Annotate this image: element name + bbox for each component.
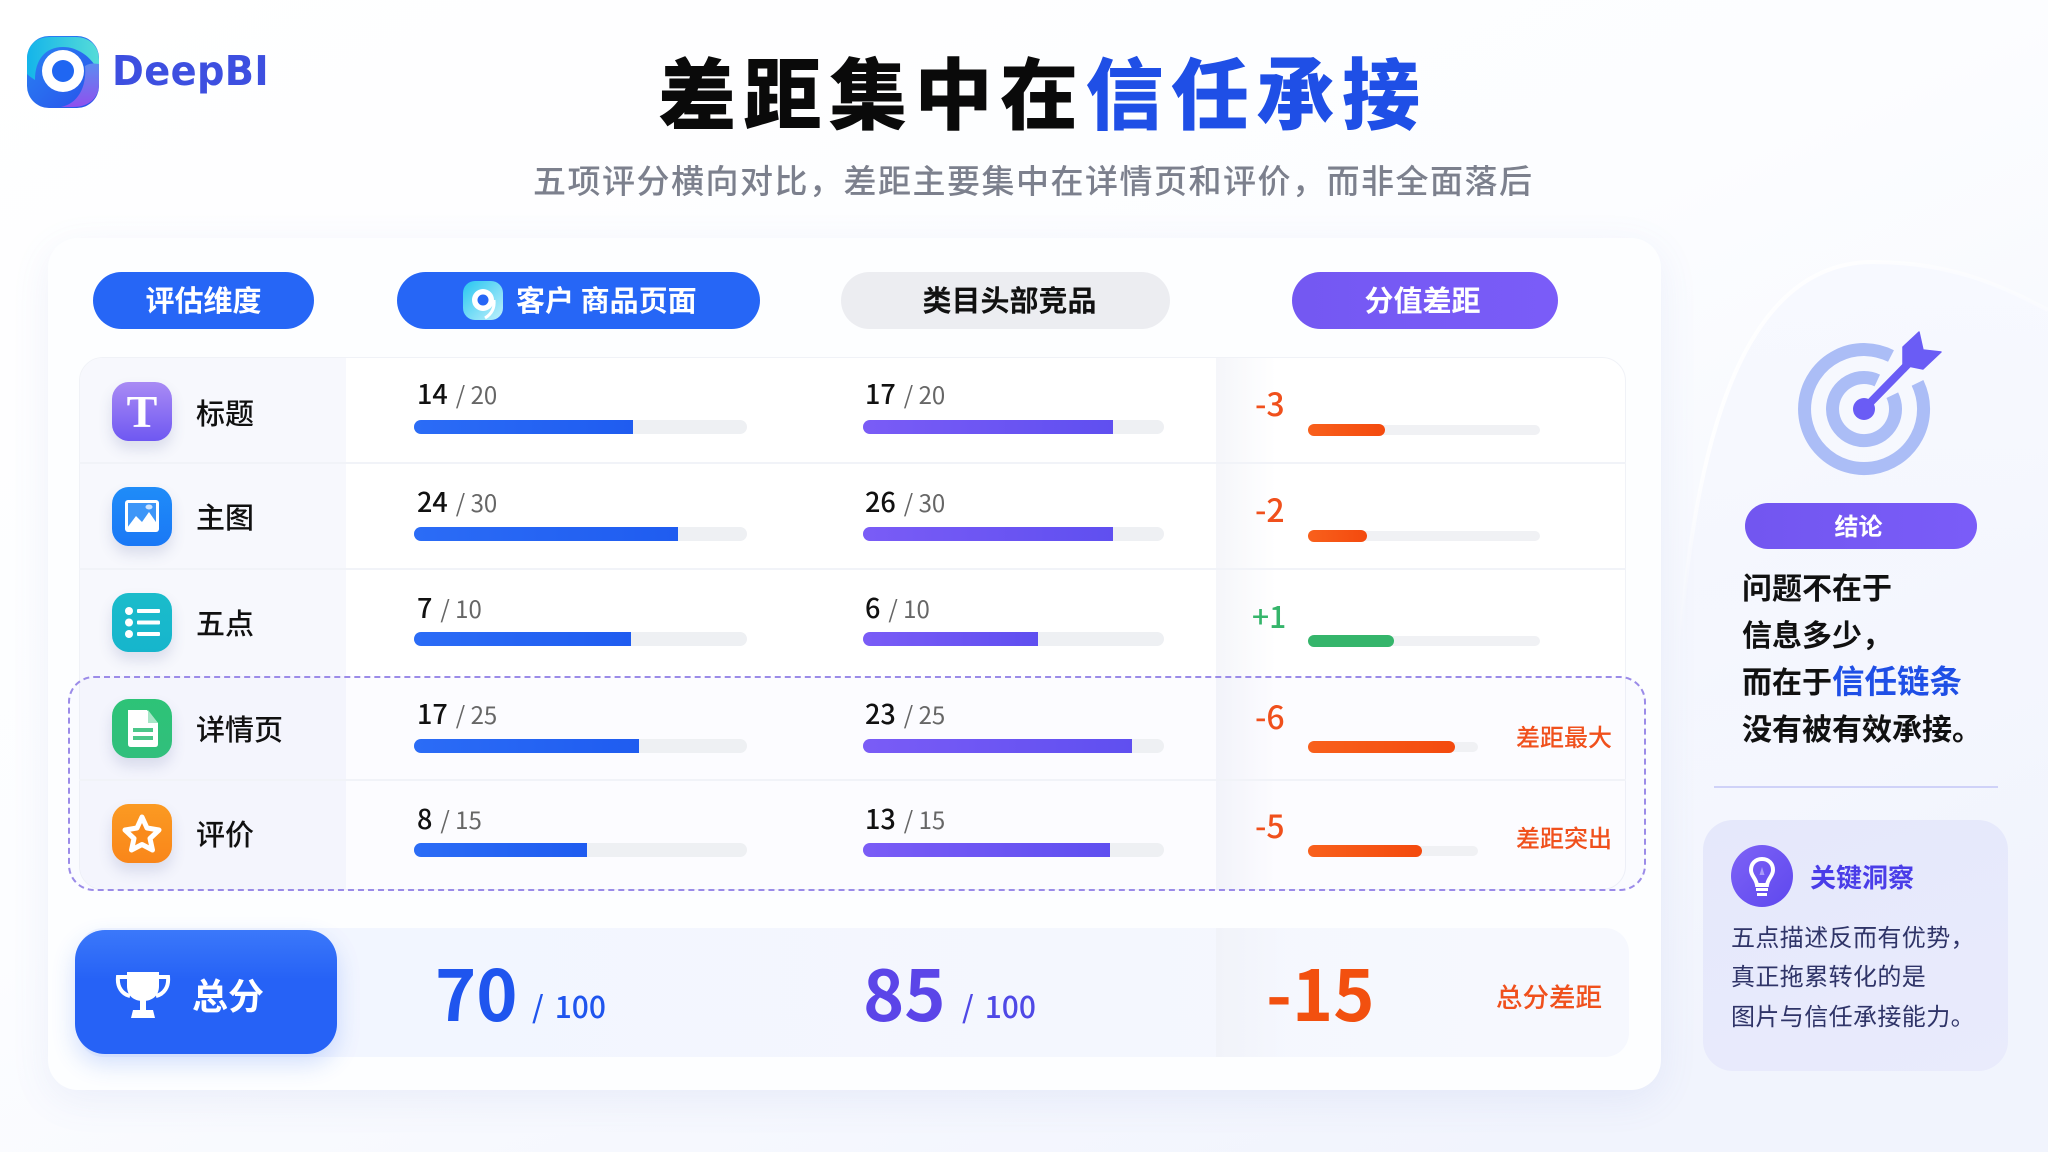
customer bar [414,632,747,646]
highlight frame: biggest gaps [68,676,1646,891]
icon: T [112,382,172,441]
icon: list [112,593,172,652]
gap total label: 总分差距 [1496,976,1602,1015]
line 2: 信息多少， [1742,611,1892,655]
gap value: +1 [1252,593,1286,637]
line 3: 而在于信任链条 [1742,656,1962,703]
gap tag: 差距最大 [1516,718,1612,753]
competitor total max: / 100 [962,983,1036,1027]
customer score: 14 / 20 [417,373,497,412]
icon: T: T [127,386,157,437]
header: 类目头部竞品: 类目头部竞品 [922,278,1096,320]
gap total: -15 [1266,941,1374,1042]
row: 详情页 [108,693,1625,781]
competitor score: 26 / 30 [865,481,945,520]
heading: 关键洞察 [1810,858,1914,895]
gap value: -5 [1255,802,1285,848]
competitor bar [863,739,1164,753]
gap value: -2 [1255,486,1285,532]
customer score: 17 / 25 [417,693,497,732]
gap bar [1308,742,1478,752]
gap value: -6 [1255,693,1285,739]
logo mark [27,36,99,108]
header: 分值差距: 分值差距 [1364,278,1480,320]
icon: trophy [116,972,170,1018]
customer bar [414,527,747,541]
logo wordmark: DeepBI [112,47,269,95]
mini logo [463,281,503,320]
line 3: 图片与信任承接能力。 [1731,997,1975,1032]
row: 主图 [108,481,1625,570]
customer total: 70 [435,941,518,1042]
competitor score: 6 / 10 [865,587,930,626]
competitor bar [863,527,1164,541]
insight body text [1731,918,1975,1032]
gap value: -3 [1255,380,1285,426]
conclusion text [1742,564,1982,749]
customer total max: / 100 [532,983,606,1027]
competitor score: 17 / 20 [865,373,945,412]
badge: 结论: 结论 [1834,507,1882,542]
label: 详情页 [196,707,283,749]
header: 客户 商品页面 [397,272,760,329]
table frame [79,357,1626,890]
row: 评价 [108,798,1612,876]
competitor bar [863,632,1164,646]
icon: light bulb [1731,845,1793,907]
gap column shading [1216,928,1286,1057]
competitor score: 13 / 15 [865,798,945,837]
customer bar [414,739,747,753]
header: 评估维度 [93,272,314,329]
line 1: 五点描述反而有优势， [1731,918,1975,953]
line 4: 没有被有效承接。 [1742,705,1982,749]
label: 评价 [196,812,254,854]
title: 差距集中在信任承接 [658,34,1428,146]
competitor score: 23 / 25 [865,693,945,732]
line 1: 问题不在于 [1742,564,1892,608]
label: 五点 [196,601,254,643]
panel: comparison table card [48,238,1661,1090]
header label: 客户 商品页面 [516,278,697,320]
gap bar [1308,531,1540,541]
subtitle: 五项评分横向对比，差距主要集中在详情页和评价，而非全面落后 [533,155,1534,203]
total label button [75,930,337,1054]
gap bar [1308,636,1540,646]
panel: key insight [1703,820,2008,1071]
dimension column background [80,358,346,891]
label: 总分 [192,968,264,1020]
competitor total: 85 [863,941,946,1042]
customer score: 24 / 30 [417,481,497,520]
icon: star [112,804,172,863]
label: 主图 [196,495,254,537]
total row [79,928,1629,1057]
icon: document [112,699,172,758]
gap column shading [1216,358,1276,891]
competitor bar [863,843,1164,857]
customer score: 7 / 10 [417,587,482,626]
header: 分值差距 [1292,272,1558,329]
header: 类目头部竞品 [841,272,1170,329]
logo: DeepBI [27,36,269,108]
gap bar [1308,846,1478,856]
row: 五点 [108,587,1540,664]
row: 标题 [108,373,1625,464]
gap bar [1308,425,1540,435]
label: 标题 [196,391,254,433]
customer bar [414,420,747,434]
competitor bar [863,420,1164,434]
icon: image [112,487,172,546]
icon: target with arrow [1798,331,1942,476]
badge: 结论 [1745,503,1977,549]
gap tag: 差距突出 [1516,819,1612,854]
customer bar [414,843,747,857]
customer score: 8 / 15 [417,798,482,837]
line 2: 真正拖累转化的是 [1731,957,1926,992]
header: 评估维度: 评估维度 [145,278,262,320]
